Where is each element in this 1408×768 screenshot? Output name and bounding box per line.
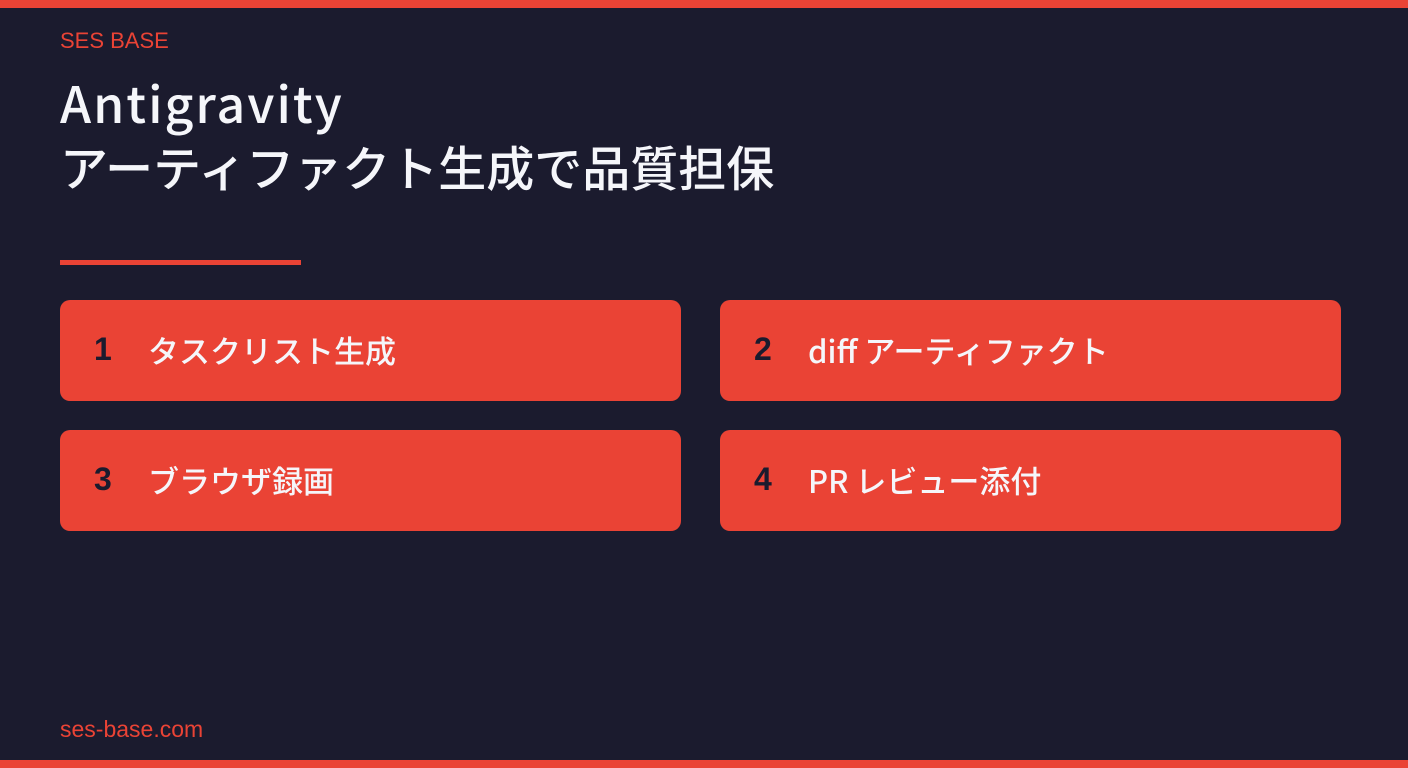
card 4: 4 xyxy=(754,461,772,497)
card 3: ブラウザ録画 xyxy=(148,457,334,502)
card 1 xyxy=(60,300,681,401)
footer url: ses-base.com xyxy=(60,716,203,742)
card 1: タスクリスト生成 xyxy=(148,327,396,372)
card 2: diff アーティファクト xyxy=(808,327,1109,372)
card 2 xyxy=(720,300,1341,401)
card 2: 2 xyxy=(754,331,772,367)
card 1: 1 xyxy=(94,331,112,367)
title: アーティファクト生成で品質担保 xyxy=(60,130,774,200)
title: Antigravity xyxy=(60,66,344,138)
card 4 xyxy=(720,430,1341,531)
card 3: 3 xyxy=(94,461,112,497)
title xyxy=(60,66,774,200)
card 4: PR レビュー添付 xyxy=(808,457,1041,502)
brand label: SES BASE xyxy=(60,28,169,53)
card 3 xyxy=(60,430,681,531)
accent underline xyxy=(60,260,301,265)
